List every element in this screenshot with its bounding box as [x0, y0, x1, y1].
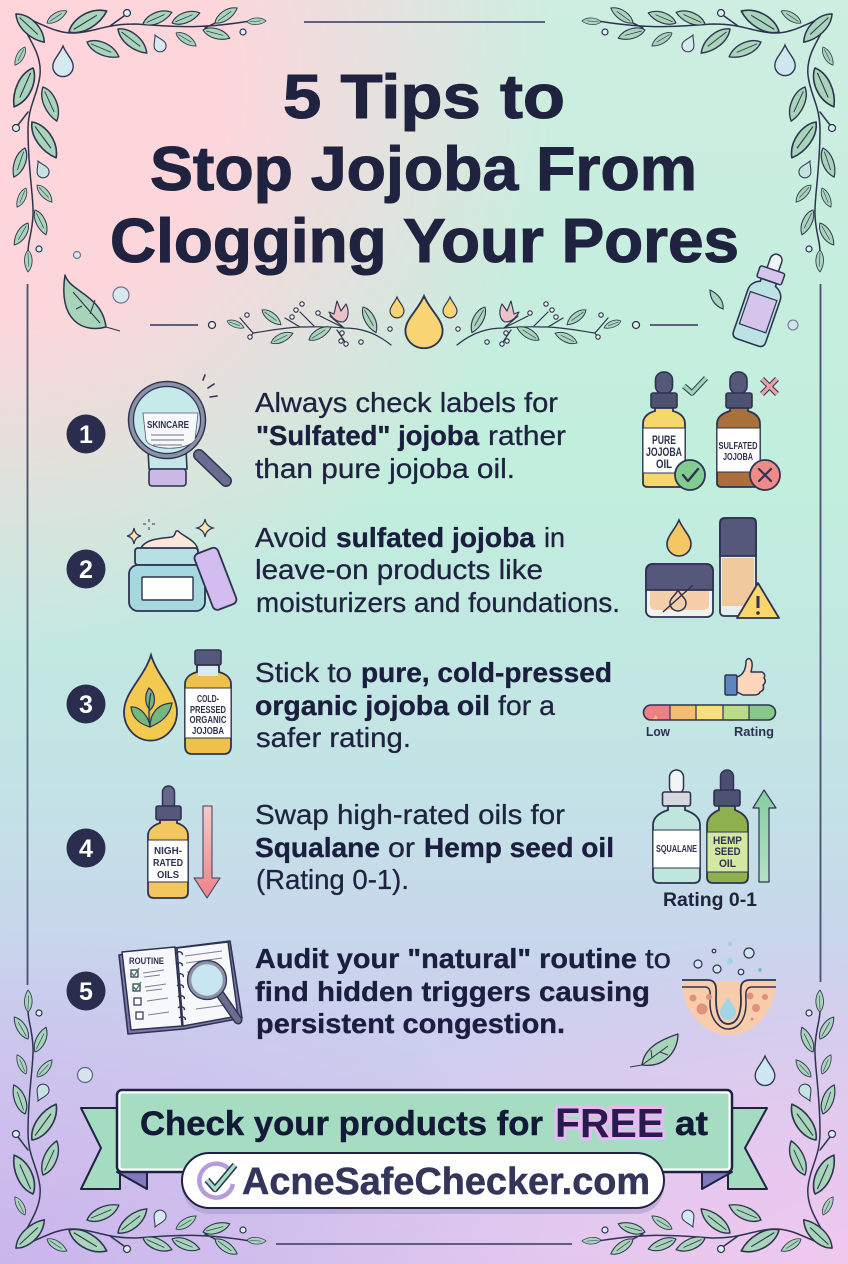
corner vine: top right [582, 4, 840, 272]
banner heading: at [675, 1105, 708, 1143]
text: tip 3: for a [498, 690, 555, 721]
text: tip 2: sulfated jojoba [336, 522, 535, 553]
number badge 3 [66, 684, 106, 724]
text: tip 1: rather [488, 420, 566, 451]
icon: oil drop with leaves and bottle [124, 650, 231, 754]
banner heading: Check your products for [140, 1105, 543, 1143]
text: tip 2: in [544, 522, 565, 553]
icon: bottom water drop [755, 1056, 775, 1086]
banner heading: FREE [555, 1100, 664, 1146]
bottle: hemp seed oil: OIL [719, 858, 736, 870]
bottle: hemp seed oil: HEMP [713, 835, 742, 847]
tip 3 [66, 650, 776, 754]
text: tip 1: than pure jojoba oil. [255, 453, 515, 484]
text: tip 5: Audit your "natural" routine [255, 943, 637, 974]
tip 4 [66, 770, 776, 911]
bottle: pure jojoba [643, 372, 706, 490]
title: Stop Jojoba From [150, 135, 697, 204]
icon: magnifier over skincare tube: SKINCARE [147, 419, 189, 431]
icon: bottom leaf [630, 1034, 678, 1067]
text: tip 2: leave-on products like [255, 554, 543, 585]
ornament divider with oil drops [150, 296, 698, 348]
number badge 4: 4 [79, 835, 93, 863]
chart: rating scale with thumbs up [643, 659, 776, 739]
number badge 1 [66, 414, 106, 454]
icon: large leaf [64, 252, 129, 331]
icon: water drop top left [53, 46, 73, 77]
icon: thumbs up [725, 659, 765, 695]
text: tip 4: Squalane [255, 832, 380, 863]
text: tip 5 [255, 943, 671, 1039]
website pill [182, 1153, 664, 1214]
tip 2 [66, 518, 779, 618]
icon: squalane and hemp seed oil with up arrow: Rating 0-1 [663, 890, 757, 911]
text: tip 3 [255, 657, 612, 753]
tip 1 [66, 372, 780, 490]
banner heading [140, 1100, 708, 1146]
chart: rating scale with thumbs up: Rating [734, 725, 774, 739]
icon: bubble [78, 1068, 92, 1082]
icon: water drop top right [775, 45, 795, 76]
bottle: pure jojoba: OIL [656, 459, 672, 471]
title [110, 63, 739, 276]
number badge 2 [66, 550, 106, 588]
number badge 1: 1 [79, 421, 93, 449]
bottle: sulfated jojoba: SULFATED [718, 440, 758, 452]
icon: oil drop with leaves and bottle: PRESSED [190, 705, 226, 716]
text: tip 1: "Sulfated" jojoba [256, 420, 479, 451]
ribbon panel [117, 1090, 732, 1172]
icon: clogged pore diagram [682, 942, 776, 1035]
ribbon tail left [81, 1108, 147, 1189]
text: tip 5: to [645, 943, 671, 974]
text: tip 5: find hidden triggers causing [255, 976, 650, 1007]
text: tip 2 [255, 522, 620, 618]
title: Clogging Your Pores [110, 207, 739, 276]
icon: high-rated oil bottle with down arrow: OILS [157, 869, 179, 881]
text: tip 4: (Rating 0-1). [256, 864, 409, 895]
number badge 4 [66, 828, 106, 868]
bottle: pure jojoba: JOJOBA [646, 447, 682, 459]
text: tip 3: safer rating. [256, 722, 411, 753]
icon: pure vs sulfated bottles [643, 372, 780, 490]
corner vine: bottom right [582, 990, 840, 1258]
icon: oil drop with leaves and bottle: COLD- [197, 694, 219, 705]
bottle: hemp seed oil [707, 770, 748, 883]
icon: open cream jar [127, 519, 238, 611]
tip 5 [66, 941, 776, 1039]
icon: magnifier over skincare tube [128, 375, 226, 486]
bottle: pure jojoba: PURE [652, 435, 676, 447]
icon: high-rated oil bottle with down arrow: NIGH- [154, 845, 182, 857]
corner vine: top left [8, 4, 266, 272]
icon: squalane and hemp seed oil with up arrow [653, 770, 776, 911]
icon: routine notebook with magnifier: ROUTINE [129, 956, 164, 967]
text: tip 4 [255, 799, 614, 895]
icon: tilted serum bottle [732, 249, 794, 348]
bottle: squalane [653, 770, 700, 883]
number badge 3: 3 [79, 691, 93, 719]
text: tip 1 [255, 387, 566, 484]
text: tip 1: Always check labels for [255, 387, 558, 418]
number badge 5: 5 [79, 978, 93, 1006]
chart: rating scale with thumbs up: Low [646, 725, 670, 739]
bottle: sulfated jojoba [717, 372, 780, 490]
icon: cosmetics with warning [646, 518, 779, 618]
title: 5 Tips to [283, 63, 565, 132]
bottle: hemp seed oil: SEED [714, 846, 741, 858]
icon: high-rated oil bottle with down arrow [148, 786, 220, 898]
text: tip 2: Avoid [255, 522, 327, 553]
icon: check logo [199, 1164, 235, 1198]
number badge 5 [66, 972, 106, 1010]
bottle: sulfated jojoba: JOJOBA [723, 451, 753, 463]
number badge 2: 2 [79, 556, 93, 584]
text: tip 4: Hemp seed oil [424, 832, 614, 863]
text: tip 3: Stick to [255, 657, 352, 688]
call to action banner [81, 1090, 767, 1214]
icon: oil drop with leaves and bottle: JOJOBA [192, 726, 224, 737]
bottle: squalane: SQUALANE [656, 844, 697, 855]
text: tip 3: pure, cold-pressed [361, 657, 612, 688]
text: tip 5: persistent congestion. [256, 1008, 565, 1039]
corner vine: bottom left [8, 990, 266, 1258]
icon: oil drop with leaves and bottle: ORGANIC [190, 715, 226, 726]
text: tip 4: Swap high-rated oils for [255, 799, 565, 830]
icon: small leaf and bubble [710, 290, 798, 330]
text: tip 4: or [388, 832, 415, 863]
website pill: AcneSafeChecker.com [242, 1161, 650, 1203]
ribbon tail right [702, 1108, 767, 1189]
text: tip 3: organic jojoba oil [255, 690, 490, 721]
text: tip 2: moisturizers and foundations. [256, 587, 620, 618]
icon: high-rated oil bottle with down arrow: RATED [153, 857, 183, 869]
icon: routine notebook with magnifier [119, 941, 242, 1034]
